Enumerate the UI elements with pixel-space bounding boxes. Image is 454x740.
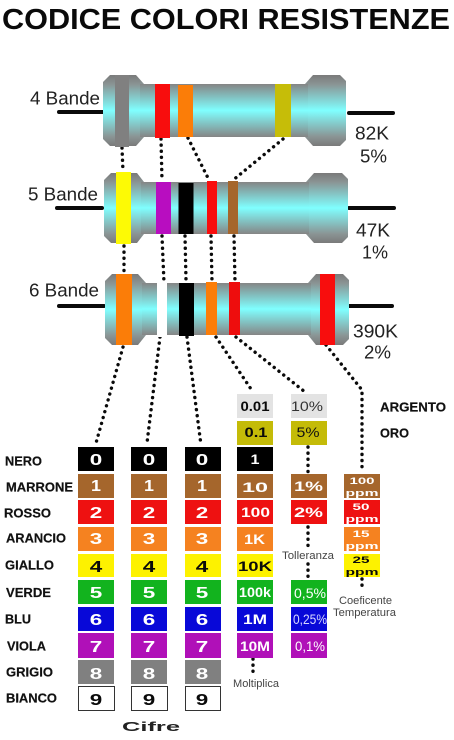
tolerance column: 0,1% [295,638,325,654]
digit column 1: 5 [90,585,102,602]
color names: NERO [5,454,42,468]
band: red tempco [320,274,335,345]
band: purple [156,182,171,234]
digit column 3: 8 [196,666,208,683]
color names: GIALLO [5,558,54,572]
digit column 3 [185,447,221,710]
digit column 2: 2 [143,505,155,522]
multiplier column: 0.01 [240,398,270,414]
title: CODICE COLORI RESISTENZE [2,4,450,36]
resistor: 5 bands [57,172,394,244]
value: 390K 2% [353,322,398,362]
connector lines between resistors and table [96,138,362,672]
band: orange [116,274,132,345]
band: yellow [116,172,131,244]
digit column 3: 3 [196,531,208,548]
digit column 1: 2 [90,505,102,522]
color names: VERDE [6,586,51,600]
value: 82K 5%: 5% [360,146,387,166]
multiplier column: 1M [243,611,267,627]
temperature coefficient column: ppm [346,567,378,578]
multiplier column: 10 [242,479,268,495]
digit column 1: 4 [90,559,102,576]
label: ARGENTO: ARGENTO [380,400,446,414]
label: 6 Bande: 6 Bande [29,280,99,300]
color names [4,454,73,706]
caption: Coeficente Temperatura [333,595,397,619]
band: orange [206,282,217,335]
color names: MARRONE [6,480,73,494]
digit column 2: 7 [143,639,155,656]
multiplier column: 10M [240,638,270,654]
digit column 2: 8 [143,666,155,683]
multiplier column: 100 [241,504,270,520]
value: 82K 5% [355,124,389,166]
band: white [157,281,167,337]
digit column 2: 4 [143,559,155,576]
digit column 1: 9 [90,692,102,709]
caption: Tolleranza: Tolleranza [282,550,335,562]
band: red [155,84,170,138]
digit column 2: 9 [143,692,155,709]
temperature coefficient column [344,474,380,578]
temperature coefficient column: 15 [352,529,371,540]
color names: BLU [5,612,31,626]
digit column 2 [131,447,168,710]
resistor: 6 bands [59,274,392,345]
band: black [178,183,194,234]
caption: Coeficente Temperatura: Temperatura [333,607,397,619]
multiplier column [237,394,273,658]
digit column 3: 6 [196,612,208,629]
multiplier column: 0.1 [244,424,268,440]
band: brown [228,181,238,234]
multiplier column: 1 [250,451,260,467]
band: red [229,282,240,335]
digit column 3: 5 [196,585,208,602]
label: 4 Bande: 4 Bande [30,88,100,108]
caption: Moltiplica: Moltiplica [233,678,280,690]
multiplier column: 10K [238,558,272,574]
value: 47K 1% [356,220,390,262]
value: 47K 1%: 47K [356,220,390,240]
temperature coefficient column: 50 [352,502,370,513]
tolerance column: 2% [294,504,324,520]
digit column 2: 1 [144,478,154,495]
digit column 1: 1 [91,478,101,495]
caption: Cifre: Cifre [122,719,180,734]
resistor: 4 bands [59,75,393,147]
tolerance column [291,394,327,658]
multiplier column: 1K [244,531,265,547]
multiplier column: 100k [239,584,271,600]
digit column 3: 7 [196,639,208,656]
band: red [207,181,217,234]
value: 390K 2%: 2% [364,342,391,362]
temperature coefficient column: ppm [346,514,378,525]
band: gold [275,84,291,137]
value: 82K 5%: 82K [355,124,389,144]
digit column 1 [78,447,114,710]
digit column 1: 0 [90,452,102,469]
digit column 3: 2 [196,505,208,522]
band: orange [178,85,193,137]
digit column 1: 8 [90,666,102,683]
color names: GRIGIO [6,666,53,680]
tolerance column: 10% [291,398,323,414]
digit column 3: 4 [196,559,208,576]
color names: VIOLA [7,640,46,654]
digit column 3: 9 [196,692,208,709]
tolerance column: 0,5% [294,585,326,601]
tolerance column: 1% [294,478,324,494]
label: 5 Bande: 5 Bande [28,184,98,204]
label: ORO: ORO [380,426,409,440]
digit column 2: 6 [143,612,155,629]
value: 390K 2%: 390K [353,322,398,342]
tolerance column: 0,25% [293,611,327,627]
tolerance column: 5% [296,424,320,440]
digit column 2: 3 [143,531,155,548]
color names: ARANCIO [6,532,66,546]
temperature coefficient column: ppm [346,541,378,552]
digit column 2: 0 [143,452,155,469]
digit column 2: 5 [143,585,155,602]
caption: Coeficente Temperatura: Coeficente [339,595,392,607]
band: black [179,283,194,336]
digit column 3: 0 [196,452,208,469]
temperature coefficient column: 25 [352,555,371,566]
band: gray [115,75,129,147]
digit column 1: 6 [90,612,102,629]
color names: BIANCO [6,692,57,706]
value: 47K 1%: 1% [362,242,388,262]
temperature coefficient column: 100 [350,476,374,487]
digit column 1: 7 [90,639,102,656]
digit column 3: 1 [197,478,207,495]
color names: ROSSO [4,506,51,520]
digit column 1: 3 [90,531,102,548]
temperature coefficient column: ppm [346,488,378,499]
